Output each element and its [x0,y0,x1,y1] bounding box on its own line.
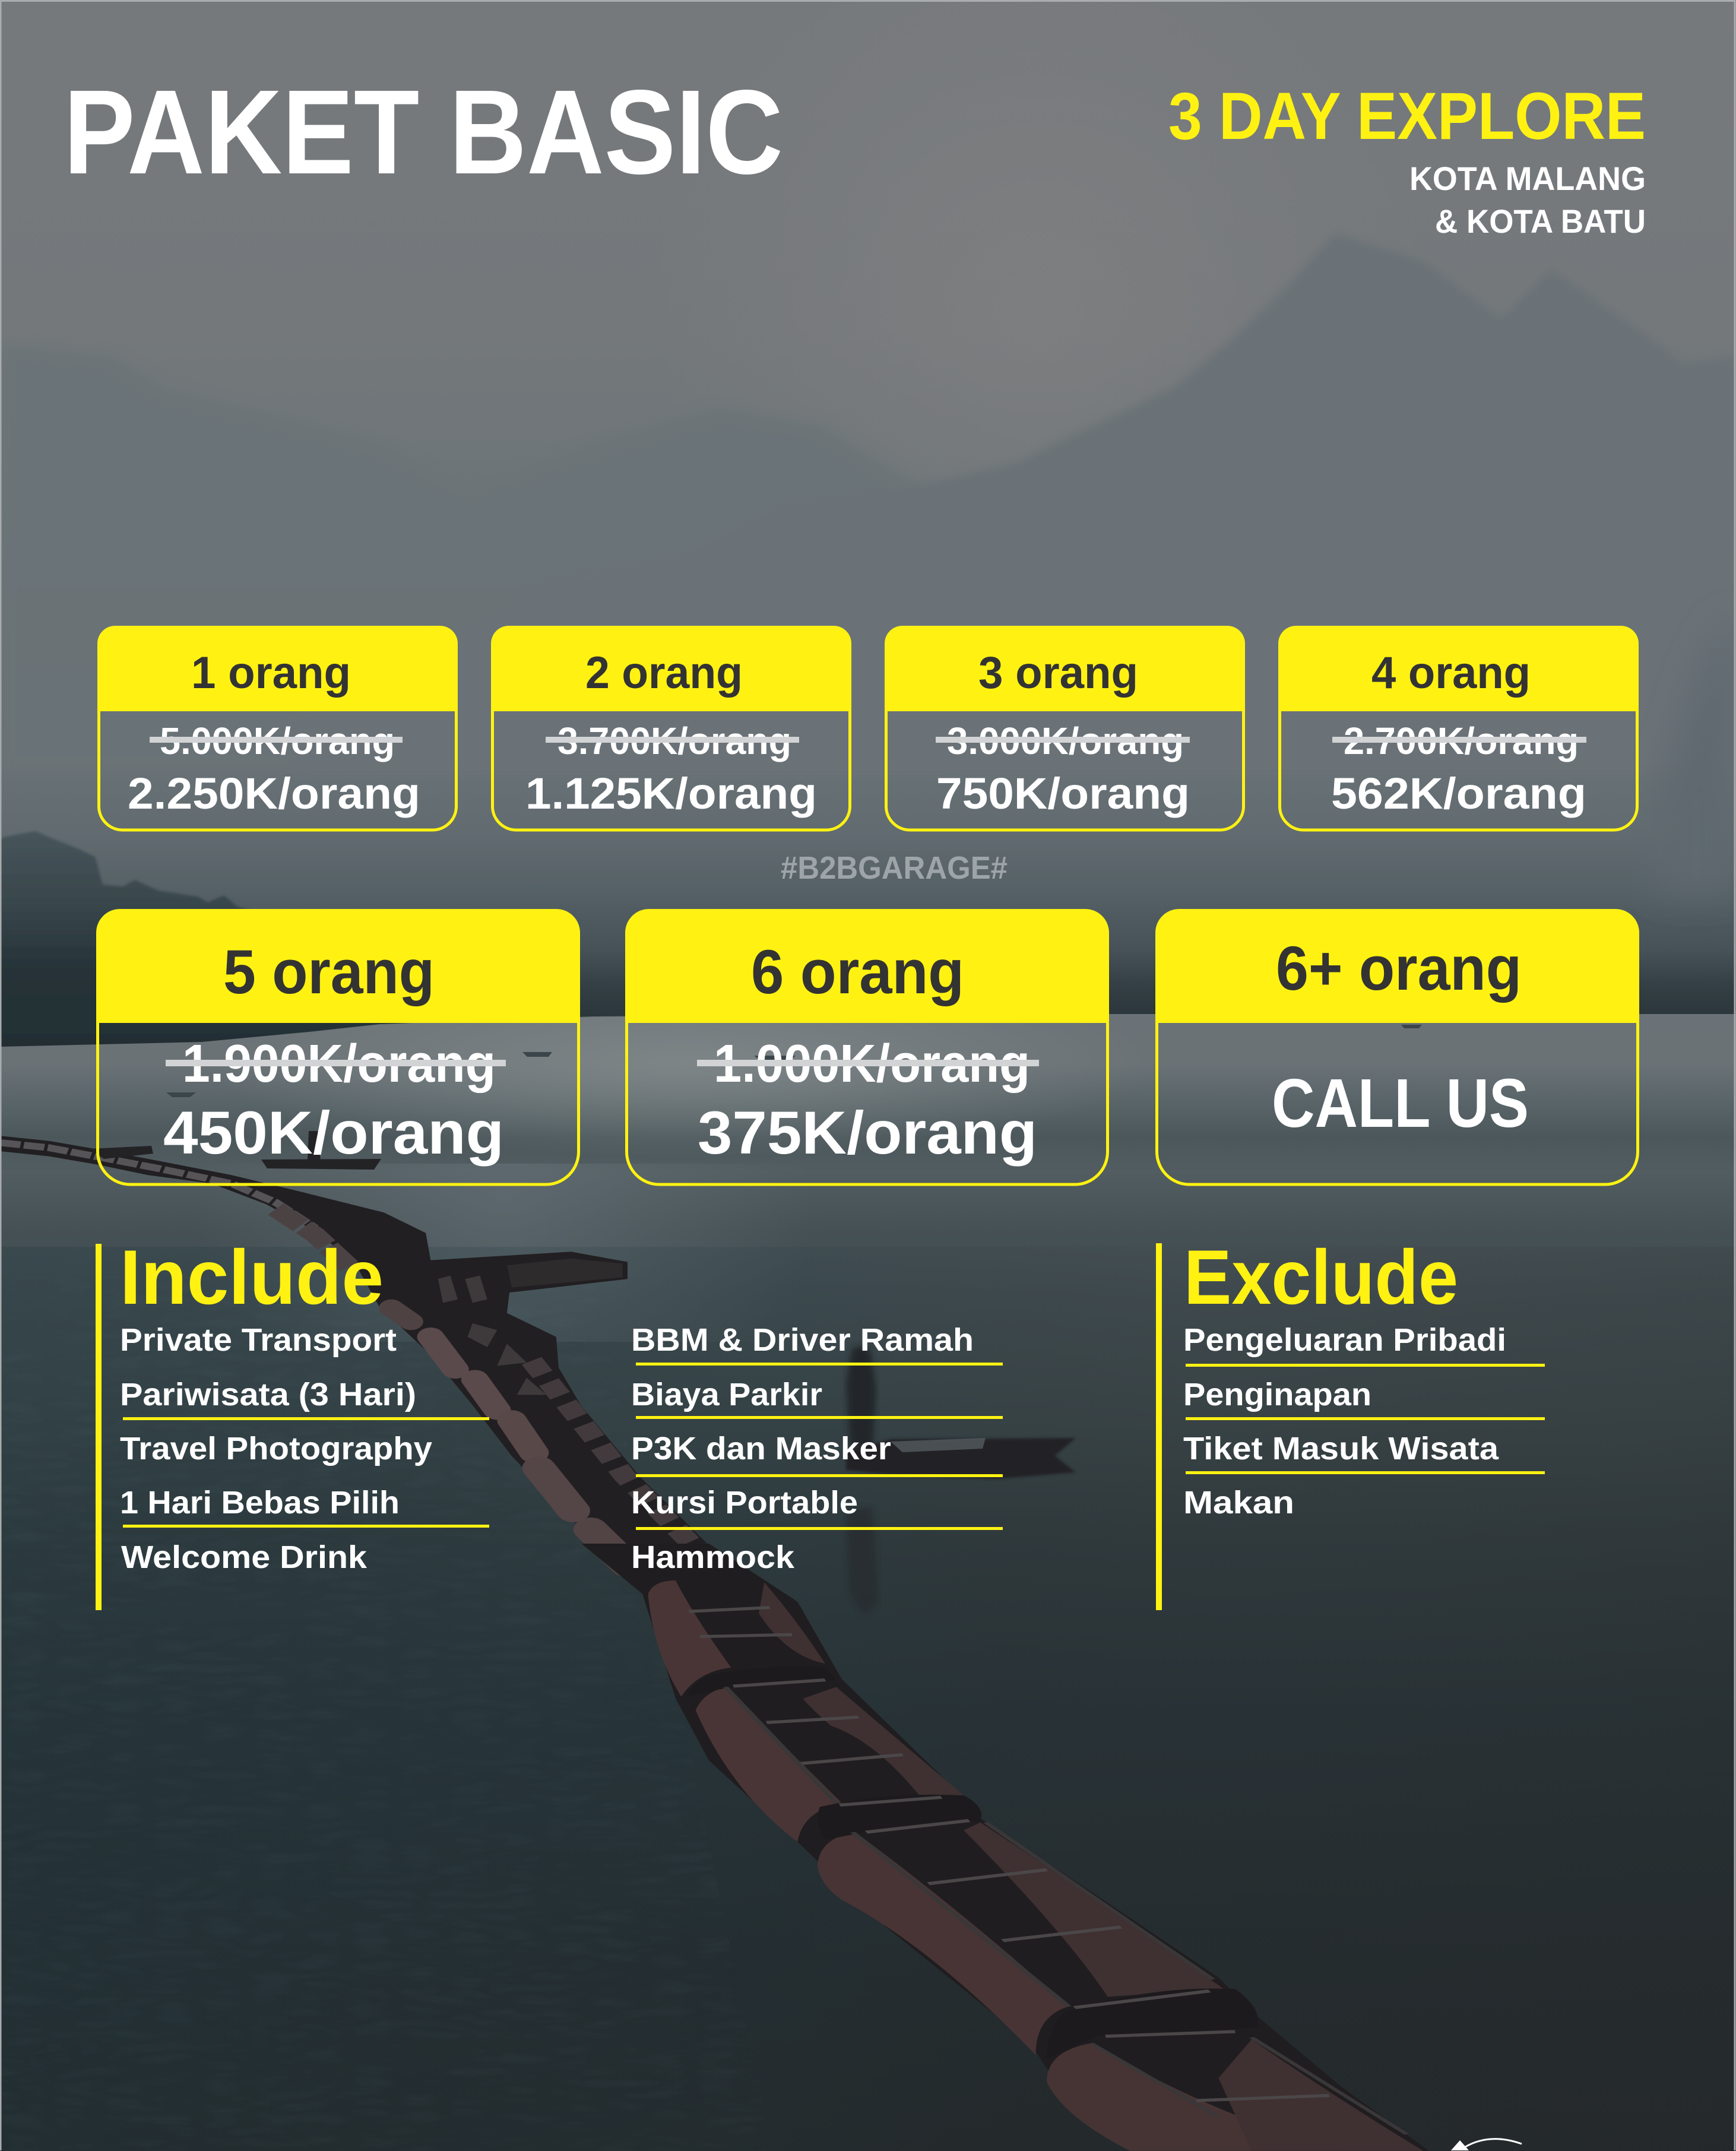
price card: 4 orang [1278,626,1639,830]
lake light band [202,1015,1247,1158]
subtitle block [1168,79,1646,240]
panel: include [96,1234,1003,1610]
price card: 1 orang: 5.000K/orang [160,720,395,762]
heading: include: Include [120,1234,384,1320]
price card: 2 orang: 1.125K/orang [525,769,817,818]
price card: 5 orang: 1.900K/orang [182,1034,496,1094]
sky glow [653,0,1425,695]
include list column 1: Welcome Drink [121,1539,368,1575]
front mountain right [297,233,1736,772]
small boats near pipeline [89,1146,381,1170]
price card: 2 orang: 3.700K/orang [557,720,791,762]
location line 2: & KOTA BATU [1435,202,1646,240]
panel: exclude [1156,1234,1545,1610]
price card: 2 orang [491,626,851,830]
subtitle: 3 day explore: 3 DAY EXPLORE [1168,79,1646,153]
price card: 3 orang: 3 orang [978,648,1138,698]
exclude list: Tiket Masuk Wisata [1183,1431,1499,1466]
heading: exclude: Exclude [1184,1234,1458,1320]
include list column 1: Pariwisata (3 Hari) [120,1377,416,1412]
price card: 4 orang: 4 orang [1371,648,1531,698]
icon: cropped logo mark [1451,2139,1522,2150]
figure reflection [846,1508,879,1615]
include list column 2: P3K dan Masker [631,1431,891,1466]
price card: 3 orang: 3.000K/orang [947,720,1184,762]
price card: 1 orang: 1 orang [191,648,351,698]
boat deck highlights [891,1438,986,1452]
include list column 1: Private Transport [120,1322,397,1358]
price card: 4 orang: 2.700K/orang [1344,720,1579,762]
include list column 2: Kursi Portable [631,1485,858,1520]
right near hill [1656,612,1736,891]
price card: 6 orang [625,909,1109,1184]
water colour tone [0,1247,1736,2151]
exclude list: Makan [1183,1485,1294,1520]
lower pipeline [581,1544,1429,2151]
exclude list [1183,1322,1545,1520]
sky [0,0,1736,1027]
price card: 6 orang: 1.000K/orang [714,1034,1030,1094]
price card: 6 orang: 375K/orang [698,1099,1037,1167]
price card: 1 orang [97,626,458,830]
lake water [0,1014,1736,2151]
price card: 3 orang [885,626,1245,830]
price card: 4 orang: 562K/orang [1331,769,1586,818]
include list column 1: 1 Hari Bebas Pilih [120,1485,400,1520]
back mountains left [0,344,962,772]
include list column 1: Travel Photography [120,1431,432,1466]
price card: 2 orang: 2 orang [585,648,743,698]
hashtag watermark: #B2BGARAGE# [781,850,1008,886]
include list column 1 [120,1322,489,1575]
include list column 2 [631,1322,1003,1575]
price card: 5 orang: 450K/orang [163,1099,504,1167]
include list column 2: BBM & Driver Ramah [631,1322,974,1358]
left tree hill [0,831,594,1057]
moored boat [846,1438,1076,1479]
exclude list: Pengeluaran Pribadi [1183,1322,1506,1358]
water ripples texture [0,1276,772,2151]
price card: 6+ orang [1155,909,1639,1184]
price card: 6+ orang: 6+ orang [1276,934,1522,1003]
price card: 6 orang: 6 orang [751,937,964,1007]
price card: 1 orang: 2.250K/orang [128,769,420,818]
price card: 6+ orang: CALL US [1272,1065,1529,1142]
price card: 3 orang: 750K/orang [936,769,1190,818]
include list column 2: Biaya Parkir [631,1377,822,1412]
include list column 2: Hammock [631,1539,795,1575]
price card: 5 orang [96,909,580,1184]
upper pipeline [0,1136,728,1567]
far boats [166,1025,1422,1097]
price card: 5 orang: 5 orang [223,937,435,1007]
title: PAKET BASIC [64,65,783,199]
standing figure on boat [846,1347,876,1449]
exclude list: Penginapan [1183,1377,1371,1412]
distant figure on boat [308,1131,321,1161]
pier glow [196,1164,813,1342]
location line 1: KOTA MALANG [1409,160,1646,197]
